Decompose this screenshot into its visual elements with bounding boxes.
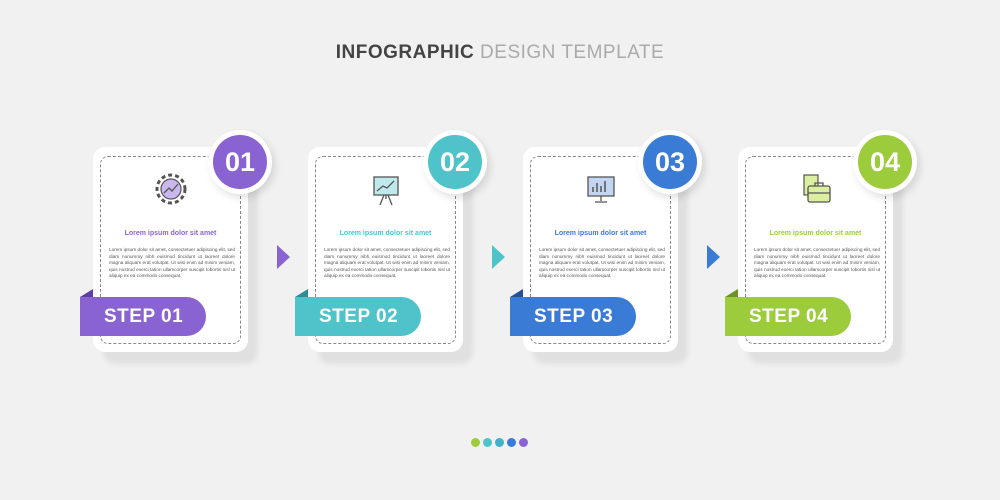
icon: presentation board <box>373 176 399 206</box>
text: Lorem ipsum dolor sit amet, consectetuer adipiscing elit, sed diam nonummy nibh euismod tincidunt ut laoreet dolore magna aliquam erat volutpat. Ut wisi enim ad minim veniam, quis nostrud exerci tation ullamcorper suscipit lobortis nisl ut aliquip ex ea commodo consequat. <box>109 247 235 278</box>
text: Lorem ipsum dolor sit amet, consectetuer adipiscing elit, sed diam nonummy nibh euismod tincidunt ut laoreet dolore magna aliquam erat volutpat. Ut wisi enim ad minim veniam, quis nostrud exerci tation ullamcorper suscipit lobortis nisl ut aliquip ex ea commodo consequat. <box>754 247 880 278</box>
badge 01 <box>208 130 272 194</box>
badge 02 <box>423 130 487 194</box>
step pill 3: STEP 03 <box>534 306 613 327</box>
badge 03 <box>638 130 702 194</box>
arrow 2 <box>492 245 505 269</box>
fold 4 <box>725 289 738 297</box>
panel: step 4 <box>738 147 893 352</box>
heading: Lorem ipsum dolor sit amet <box>770 230 861 237</box>
title: INFOGRAPHIC DESIGN TEMPLATE <box>336 42 664 63</box>
fold 3 <box>510 289 523 297</box>
panel: step 2 <box>308 147 463 352</box>
heading: Lorem ipsum dolor sit amet <box>340 230 431 237</box>
step pill 2 <box>295 297 421 336</box>
fold 1 <box>80 289 93 297</box>
fold 2 <box>295 289 308 297</box>
text: Lorem ipsum dolor sit amet, consectetuer adipiscing elit, sed diam nonummy nibh euismod tincidunt ut laoreet dolore magna aliquam erat volutpat. Ut wisi enim ad minim veniam, quis nostrud exerci tation ullamcorper suscipit lobortis nisl ut aliquip ex ea commodo consequat. <box>539 247 665 278</box>
step pill 1: STEP 01 <box>104 306 183 327</box>
icon: monitor <box>587 176 615 203</box>
icon: briefcase <box>803 174 831 203</box>
badge 04: 04 <box>870 147 900 177</box>
heading: Lorem ipsum dolor sit amet <box>555 230 646 237</box>
arrow 3 <box>707 245 720 269</box>
text: Lorem ipsum dolor sit amet, consectetuer adipiscing elit, sed diam nonummy nibh euismod tincidunt ut laoreet dolore magna aliquam erat volutpat. Ut wisi enim ad minim veniam, quis nostrud exerci tation ullamcorper suscipit lobortis nisl ut aliquip ex ea commodo consequat. <box>324 247 450 278</box>
badge 02: 02 <box>440 147 470 177</box>
badge 04 <box>853 130 917 194</box>
heading: Lorem ipsum dolor sit amet <box>125 230 216 237</box>
panel: step 3 <box>523 147 678 352</box>
badge 01: 01 <box>225 147 255 177</box>
step pill 2: STEP 02 <box>319 306 398 327</box>
panel: step 1 <box>93 147 248 352</box>
step pill 4 <box>725 297 851 336</box>
step pill 1 <box>80 297 206 336</box>
badge 03: 03 <box>655 147 685 177</box>
pagination dots <box>471 438 528 447</box>
step pill 3 <box>510 297 636 336</box>
arrow 1 <box>277 245 290 269</box>
step pill 4: STEP 04 <box>749 306 828 327</box>
icon: gear chart <box>156 174 186 204</box>
